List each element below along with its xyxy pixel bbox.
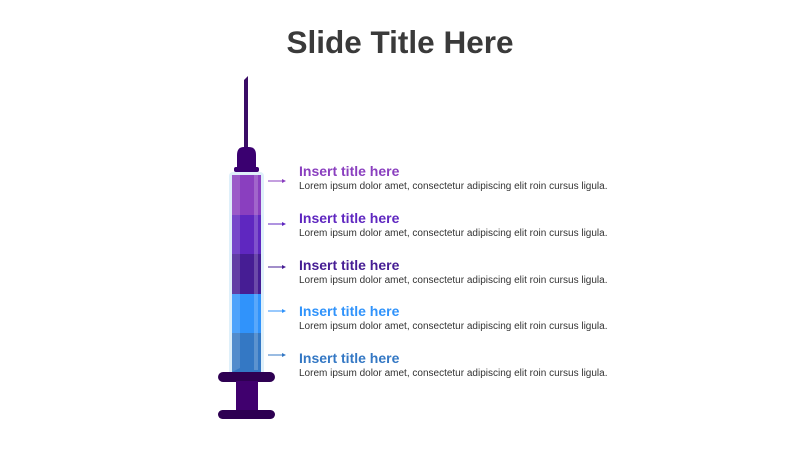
title: Slide Title Here [286, 24, 514, 60]
text block 5 [299, 350, 607, 379]
icon: hub [234, 147, 259, 172]
text block 2: Insert title here [299, 210, 399, 226]
text block 1 [299, 163, 607, 192]
text block 4: Lorem ipsum dolor amet, consectetur adipiscing elit roin cursus ligula. [299, 321, 607, 332]
text block 1: Lorem ipsum dolor amet, consectetur adipiscing elit roin cursus ligula. [299, 181, 607, 192]
text block 2: Lorem ipsum dolor amet, consectetur adipiscing elit roin cursus ligula. [299, 228, 607, 239]
text block 4 [299, 303, 607, 332]
text block 1: Insert title here [299, 163, 399, 179]
plunger [218, 372, 275, 419]
text block 3: Lorem ipsum dolor amet, consectetur adipiscing elit roin cursus ligula. [299, 275, 607, 286]
barrel [229, 172, 264, 376]
text block 3 [299, 257, 607, 286]
text block 4: Insert title here [299, 303, 399, 319]
arrows [268, 179, 286, 357]
text block 5: Insert title here [299, 350, 399, 366]
text block 2 [299, 210, 607, 239]
text block 5: Lorem ipsum dolor amet, consectetur adipiscing elit roin cursus ligula. [299, 368, 607, 379]
icon: needle [244, 76, 248, 150]
text block 3: Insert title here [299, 257, 399, 273]
